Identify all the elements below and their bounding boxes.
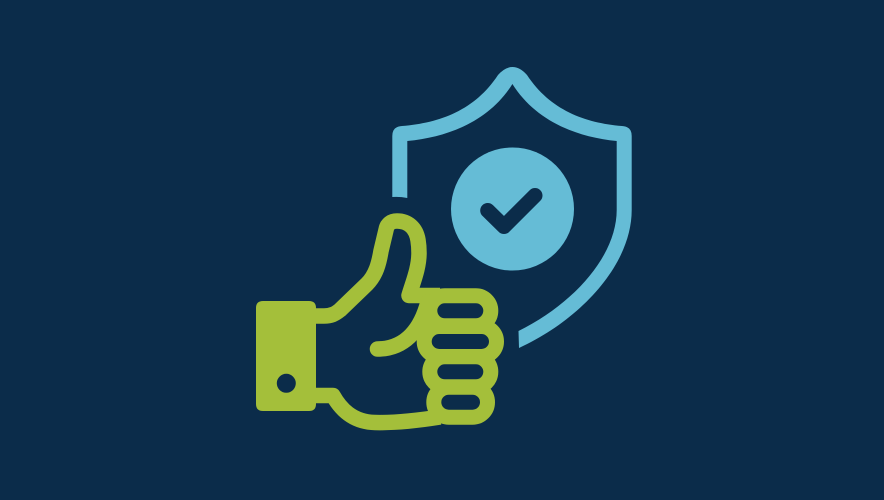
cuff — [256, 301, 316, 411]
icon: shield outline — [392, 67, 632, 348]
finger 4 — [434, 387, 488, 417]
icon: thumbs up hand — [256, 221, 496, 423]
icon: check badge — [451, 148, 574, 270]
thumb and palm outline — [316, 221, 440, 423]
palm crease — [378, 302, 428, 349]
finger 2 — [424, 326, 496, 356]
finger 3 — [430, 357, 491, 387]
finger 1 — [430, 296, 491, 326]
